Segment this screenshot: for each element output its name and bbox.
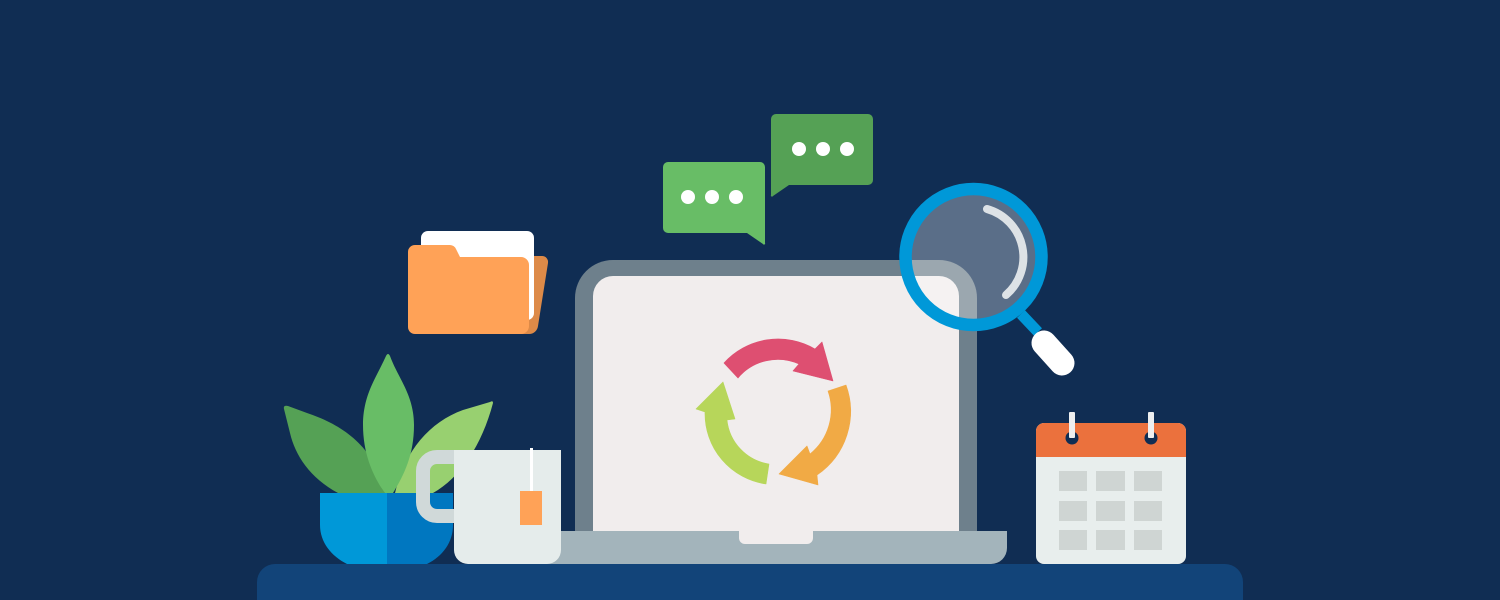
icon: magnifying glass <box>906 189 1062 363</box>
folder back flap <box>515 256 548 334</box>
laptop lid <box>575 260 977 540</box>
calendar date grid <box>1059 471 1162 550</box>
magnifier lens <box>906 189 1042 325</box>
icon: calendar <box>1036 412 1186 564</box>
calendar ring holes <box>1066 412 1158 444</box>
leaf: right <box>395 401 493 493</box>
speech bubble: dark green <box>771 114 873 197</box>
pot <box>320 493 453 564</box>
mug body <box>454 450 561 564</box>
icon: cycle arrows <box>696 339 851 485</box>
tea tag <box>520 491 542 525</box>
laptop notch <box>739 531 813 544</box>
folder front <box>408 245 529 334</box>
magnifier shaft <box>1021 314 1038 332</box>
magnifier rim <box>906 189 1042 325</box>
leaf: left <box>284 406 385 493</box>
folder paper <box>421 231 534 320</box>
calendar header <box>1036 423 1186 457</box>
arrow: pink <box>724 339 833 381</box>
laptop screen <box>593 276 959 540</box>
magnifier handle <box>1044 343 1062 363</box>
plant <box>284 354 493 493</box>
leaf: center <box>363 354 414 493</box>
desk shelf <box>257 564 1243 600</box>
calendar body <box>1036 423 1186 564</box>
mug <box>423 448 561 564</box>
laptop base <box>530 531 1007 564</box>
mug handle <box>423 457 454 516</box>
arrow: green <box>696 382 769 484</box>
magnifier highlight <box>987 209 1023 295</box>
speech bubble: light green <box>663 162 765 245</box>
tea tag string <box>530 448 533 491</box>
laptop <box>530 260 1007 564</box>
arrow: orange <box>779 385 851 485</box>
icon: folder <box>408 231 548 334</box>
